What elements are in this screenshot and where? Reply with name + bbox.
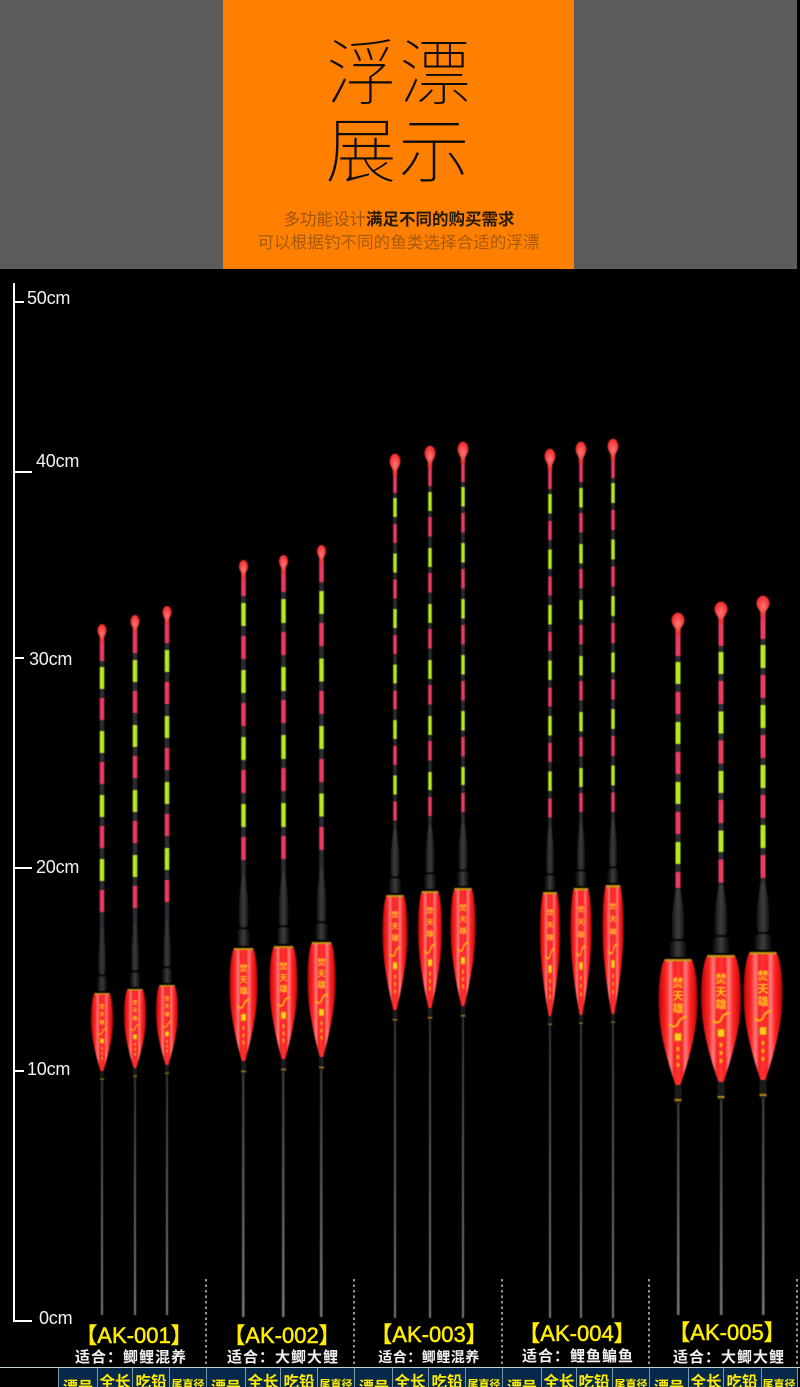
float AK-003 large: 焚天雄: [458, 903, 468, 938]
float AK-005 small: [658, 613, 698, 1315]
float AK-005 medium: [701, 602, 741, 1315]
float AK-005 large: 焚天雄: [755, 969, 771, 1008]
length scale: 0cm: [39, 1308, 72, 1328]
float AK-005 large: [744, 596, 782, 1315]
float AK-001 large: 焚天雄: [164, 995, 170, 1019]
label: AK-005: 适合：大鲫大鲤: [673, 1348, 785, 1366]
subtitle line one: 多功能设计满足不同的购买需求: [284, 206, 515, 230]
floats: AK-005: [658, 596, 782, 1315]
float AK-004 medium: [570, 442, 592, 1318]
length scale: 20cm: [36, 857, 79, 877]
header grey band: [0, 0, 797, 269]
float AK-005 medium: 焚天雄: [713, 972, 729, 1011]
table columns: AK-002: [211, 1372, 352, 1387]
float AK-004 small: [540, 449, 560, 1318]
length scale: 30cm: [29, 649, 72, 669]
float AK-001 small: [91, 624, 113, 1315]
float AK-001 medium: 焚天雄: [132, 999, 138, 1023]
float AK-002 small: 焚天雄: [238, 963, 249, 998]
label: AK-002: 适合：大鲫大鲤: [227, 1348, 339, 1366]
table columns: AK-001: [63, 1372, 204, 1387]
label: AK-001: 【AK-001】: [75, 1323, 193, 1348]
title: 浮漂: 浮漂: [326, 15, 472, 120]
group dividers: [206, 1279, 797, 1367]
subtitle line two: 可以根据钓不同的鱼类选择合适的浮漂: [257, 229, 540, 253]
label: AK-001: 适合：鲫鲤混养: [75, 1348, 187, 1366]
table columns: AK-003: [359, 1372, 500, 1387]
float AK-001 large: [156, 606, 178, 1315]
length scale: 10cm: [27, 1059, 70, 1079]
length scale: [14, 283, 79, 1328]
length scale: 40cm: [36, 451, 79, 471]
float AK-004 large: [602, 439, 624, 1318]
table columns: AK-004: [507, 1372, 648, 1387]
label: AK-004: [518, 1321, 636, 1365]
float AK-003 large: [450, 442, 476, 1318]
label: AK-005: 【AK-005】: [668, 1320, 786, 1345]
float AK-001 medium: [124, 615, 146, 1315]
table columns: AK-005: [654, 1372, 796, 1387]
header orange panel: [223, 0, 574, 269]
length scale: 50cm: [27, 288, 70, 308]
float AK-003 small: 焚天雄: [390, 910, 400, 946]
label: AK-003: [370, 1322, 488, 1365]
float AK-004 small: 焚天雄: [545, 908, 555, 946]
float AK-004 large: 焚天雄: [608, 902, 618, 940]
label: AK-003: 【AK-003】: [370, 1322, 488, 1347]
label: AK-004: 适合：鲤鱼鳊鱼: [522, 1347, 634, 1365]
float AK-002 medium: [270, 555, 298, 1317]
specification table header: [0, 1368, 800, 1387]
label: AK-002: 【AK-002】: [223, 1323, 341, 1348]
float AK-004 medium: 焚天雄: [576, 905, 586, 944]
floats: AK-001: [91, 606, 178, 1315]
float AK-002 large: [308, 545, 336, 1317]
float AK-001 small: 焚天雄: [98, 1003, 106, 1027]
float AK-002 large: 焚天雄: [316, 957, 327, 992]
floats: AK-004: [540, 439, 624, 1318]
label: AK-002: [223, 1323, 341, 1366]
floats: AK-003: [382, 442, 476, 1318]
float AK-002 medium: 焚天雄: [278, 961, 289, 996]
float AK-005 small: 焚天雄: [670, 976, 686, 1015]
label: AK-005: [668, 1320, 786, 1366]
float AK-003 medium: 焚天雄: [425, 906, 435, 942]
label: AK-001: [75, 1323, 193, 1366]
label: AK-004: 【AK-004】: [518, 1321, 636, 1346]
label: AK-003: 适合：鲫鲤混养: [378, 1349, 480, 1365]
float AK-003 medium: [418, 446, 442, 1318]
floats: AK-002: [230, 545, 336, 1317]
float AK-002 small: [230, 560, 258, 1317]
title: 展示: 展示: [325, 93, 471, 198]
float AK-003 small: [382, 454, 408, 1318]
